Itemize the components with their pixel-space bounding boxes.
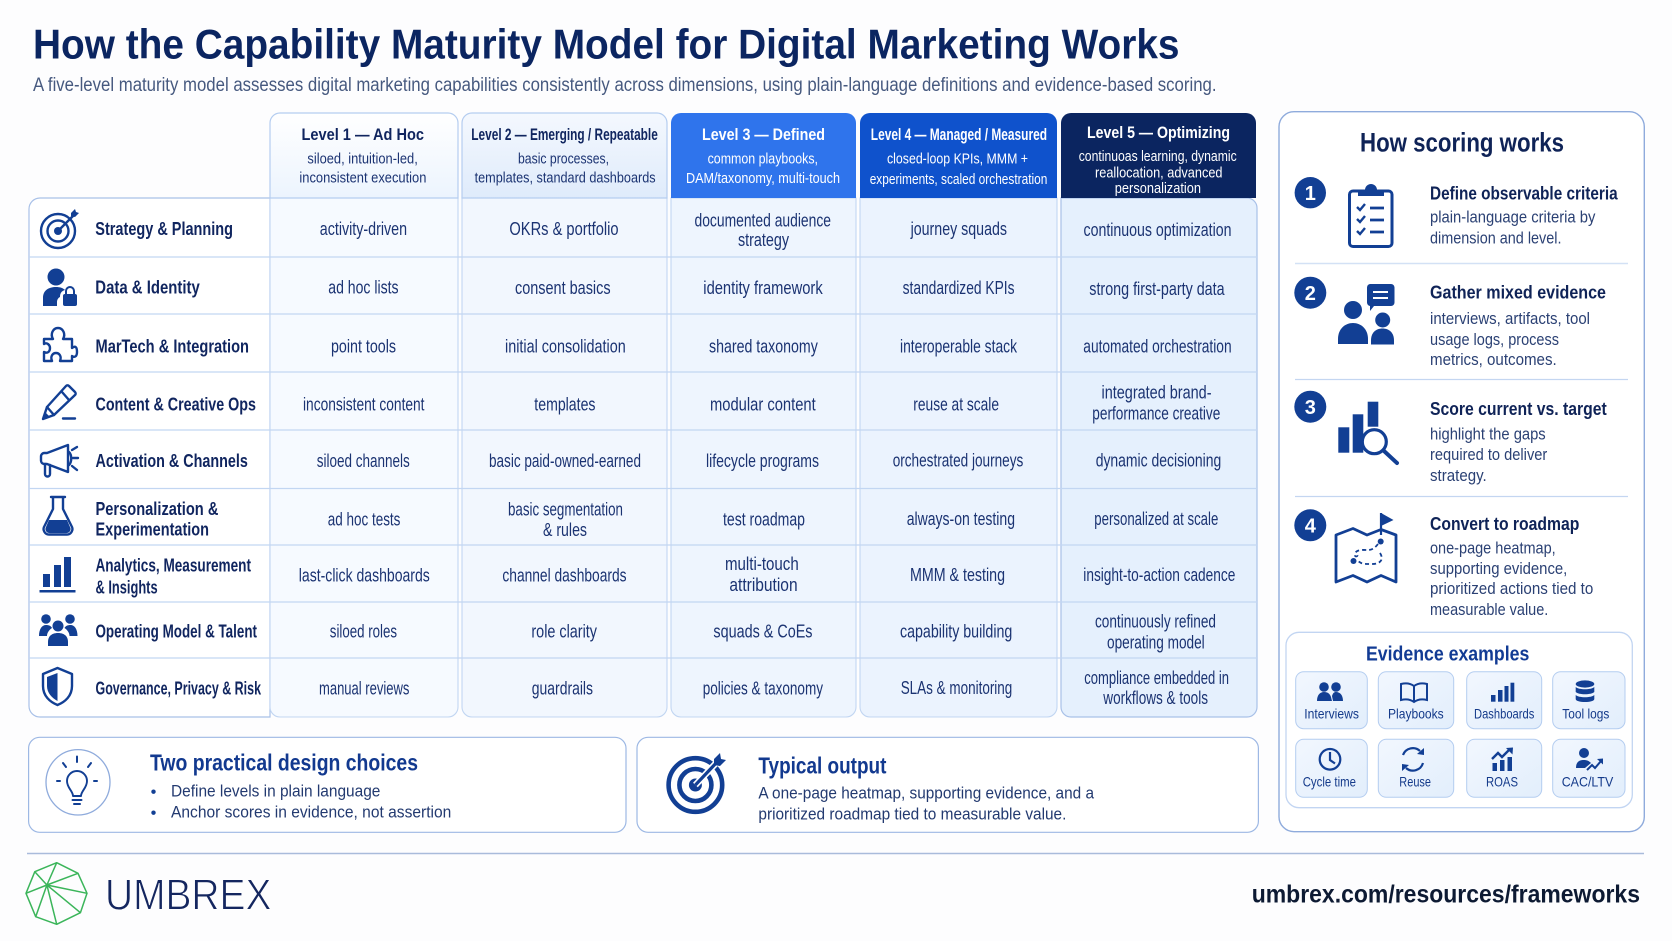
step description: interviews, artifacts, tool (1430, 310, 1590, 328)
heading: Evidence examples (1366, 644, 1529, 666)
cell: & rules (543, 520, 587, 540)
tile: reuse (1378, 739, 1454, 797)
row: personalization and experimentation (44, 497, 1218, 540)
text block: A one-page heatmap, supporting evidence, and a (758, 783, 1094, 802)
label (96, 499, 218, 540)
step description: strategy. (1430, 467, 1487, 485)
cell: identity framework (703, 278, 824, 298)
cell: activity-driven (320, 219, 407, 239)
icon: team (39, 614, 78, 646)
cell: ad hoc tests (328, 509, 400, 529)
cell: capability building (900, 622, 1012, 642)
header: level 5 (1061, 113, 1256, 198)
icon: green polygon mark (26, 863, 87, 924)
tile: interviews: Interviews (1304, 706, 1359, 722)
cell: strategy (738, 230, 789, 250)
icon: people with chat bubble (1338, 284, 1394, 344)
cell: SLAs & monitoring (901, 678, 1012, 698)
tile: roas (1467, 739, 1542, 797)
row: activation and channels (41, 445, 1221, 476)
step description: prioritized actions tied to (1430, 580, 1593, 598)
subtitle: A five-level maturity model assesses digital marketing capabilities consistently across dimensions, using plain-language definitions and evidence-based scoring. (33, 75, 1216, 96)
step description: highlight the gaps (1430, 425, 1546, 443)
number badge (1294, 391, 1326, 423)
tile: tool logs: Tool logs (1562, 706, 1609, 722)
cell: performance creative (1092, 403, 1220, 423)
icon: target (41, 209, 79, 248)
label: Operating Model & Talent (96, 622, 257, 642)
row: strategy and planning (41, 209, 1232, 250)
cell: integrated brand- (1102, 382, 1212, 402)
tile: reuse: Reuse (1399, 774, 1431, 790)
cell (1095, 611, 1216, 652)
cell: siloed roles (330, 622, 397, 642)
tile: cycle time (1296, 739, 1367, 797)
header: level 4: experiments, scaled orchestration (870, 171, 1047, 188)
cell: standardized KPIs (903, 278, 1014, 298)
step description (1430, 425, 1548, 485)
step 1 (1295, 177, 1619, 247)
tile: cac/ltv: CAC/LTV (1562, 774, 1614, 790)
label: Data & Identity (95, 277, 200, 297)
label: Experimentation (96, 520, 209, 540)
cell: policies & taxonomy (703, 679, 823, 699)
panel: maturity matrix (29, 113, 1257, 717)
row: content and creative ops (42, 382, 1220, 423)
icon: megaphone (41, 445, 78, 476)
label: Personalization & (96, 499, 218, 519)
tile: dashboards: Dashboards (1474, 706, 1534, 722)
cell (1092, 382, 1220, 423)
icon: puzzle piece (44, 328, 77, 361)
row: analytics, measurement and insights (40, 554, 1235, 597)
cell: continuous optimization (1084, 220, 1232, 240)
cell: last-click dashboards (299, 566, 430, 586)
cell: test roadmap (723, 509, 805, 529)
icon: bars with magnifier (1338, 402, 1397, 463)
heading: Typical output (758, 752, 887, 778)
cell: basic paid-owned-earned (489, 451, 641, 471)
url: umbrex.com/resources/frameworks (1252, 881, 1640, 909)
header: level 5: personalization (1115, 180, 1201, 197)
cell: lifecycle programs (706, 451, 819, 471)
cell: guardrails (532, 679, 593, 699)
cell: multi-touch (725, 554, 799, 574)
tile: cac/ltv (1553, 739, 1625, 797)
panel: two practical design choices (29, 737, 626, 832)
step description (1430, 209, 1596, 247)
heading: Two practical design choices (150, 750, 418, 776)
cell: journey squads (910, 219, 1007, 239)
label: Strategy & Planning (95, 219, 233, 239)
cell (1084, 668, 1229, 708)
cell: reuse at scale (913, 395, 999, 415)
label (96, 556, 251, 597)
header: level 5: reallocation, advanced (1095, 164, 1222, 181)
label: Activation & Channels (96, 451, 248, 471)
label: MarTech & Integration (96, 337, 249, 357)
icon: bar chart (40, 557, 76, 592)
number badge: 4 (1305, 516, 1317, 538)
tile: playbooks: Playbooks (1388, 706, 1444, 722)
tile: interviews (1296, 672, 1367, 729)
panel: typical output (637, 737, 1258, 832)
icon: flask (44, 497, 72, 535)
cell: strong first-party data (1089, 279, 1225, 299)
step description: measurable value. (1430, 601, 1548, 619)
panel: level 2 column (462, 198, 667, 717)
cell: inconsistent content (303, 395, 424, 415)
panel: level 3 column (671, 198, 856, 717)
panel: evidence examples (1286, 632, 1632, 808)
step description (1430, 539, 1593, 619)
number badge (1294, 277, 1326, 309)
header: level 4 (860, 113, 1057, 198)
label: Content & Creative Ops (96, 395, 256, 415)
header: level 5: Level 5 — Optimizing (1087, 123, 1230, 142)
step description: one-page heatmap, (1430, 539, 1556, 557)
bullet list (151, 782, 451, 822)
cell: MMM & testing (910, 565, 1005, 585)
cell: initial consolidation (505, 337, 626, 357)
cell: operating model (1107, 632, 1205, 652)
cell: interoperable stack (900, 337, 1018, 357)
row: governance, privacy and risk (43, 668, 1229, 708)
cell (508, 500, 623, 540)
cell: continuously refined (1095, 611, 1216, 631)
tile: playbooks (1378, 672, 1454, 729)
cell: dynamic decisioning (1096, 451, 1221, 471)
header: level 1: inconsistent execution (299, 169, 426, 186)
cell: always-on testing (907, 509, 1015, 529)
label: Governance, Privacy & Risk (96, 679, 262, 699)
text block: prioritized roadmap tied to measurable value. (758, 804, 1066, 823)
icon: clipboard checklist (1350, 184, 1392, 246)
panel: level 5 column (1061, 198, 1257, 717)
cell: shared taxonomy (709, 337, 818, 357)
step description (1430, 310, 1590, 369)
header: level 1: siloed, intuition-led, (307, 150, 418, 167)
header: level 3 (671, 113, 856, 198)
cell: point tools (331, 337, 396, 357)
panel: level 1 column (270, 198, 458, 717)
header: level 4: Level 4 — Managed / Measured (871, 125, 1047, 144)
cell: channel dashboards (502, 566, 626, 586)
cell: documented audience (694, 211, 831, 231)
panel: level 4 column (860, 198, 1057, 717)
cell: basic segmentation (508, 500, 623, 520)
header: level 1: Level 1 — Ad Hoc (302, 125, 424, 144)
cell: manual reviews (319, 679, 409, 699)
icon: roadmap with flag (1336, 513, 1396, 582)
step 2 (1294, 277, 1606, 369)
heading: How scoring works (1360, 128, 1564, 158)
row: martech and integration (44, 328, 1232, 361)
number badge (1295, 177, 1326, 208)
header: level 4: closed-loop KPIs, MMM + (887, 150, 1028, 168)
panel: dimension column background (29, 198, 270, 717)
row: operating model and talent (39, 611, 1216, 652)
step description: dimension and level. (1430, 229, 1562, 247)
tile: tool logs (1553, 672, 1625, 729)
label: & Insights (96, 577, 158, 597)
logo: umbrex (26, 863, 271, 924)
cell: role clarity (531, 622, 597, 642)
label: Analytics, Measurement (96, 556, 251, 576)
number badge (1294, 509, 1326, 541)
header: level 2 (462, 113, 667, 198)
step 4 (1294, 509, 1593, 619)
row: data and identity (43, 268, 1225, 306)
number badge: 3 (1305, 397, 1316, 419)
step description: metrics, outcomes. (1430, 351, 1557, 369)
bullet list: Define levels in plain language (171, 782, 380, 801)
header: level 3: Level 3 — Defined (702, 125, 825, 144)
cell: orchestrated journeys (893, 451, 1023, 471)
header: level 2: Level 2 — Emerging / Repeatable (471, 125, 658, 144)
title: How the Capability Maturity Model for Digital Marketing Works (33, 20, 1180, 68)
header: level 5: continuoas learning, dynamic (1079, 148, 1237, 165)
step title: Define observable criteria (1430, 183, 1619, 203)
step description: usage logs, process (1430, 331, 1559, 349)
text block (758, 783, 1094, 823)
wordmark: UMBREX (105, 870, 271, 919)
icon: pencil (42, 385, 76, 420)
cell: consent basics (515, 278, 611, 298)
number badge: 1 (1305, 183, 1316, 205)
cell (725, 554, 799, 595)
cell: squads & CoEs (713, 622, 812, 642)
cell: attribution (729, 575, 798, 595)
cell: modular content (710, 395, 816, 415)
cell: templates (534, 395, 596, 415)
header: level 2: templates, standard dashboards (475, 169, 656, 186)
icon: bullseye with arrow (669, 753, 726, 812)
cell: automated orchestration (1083, 337, 1232, 357)
step title: Convert to roadmap (1430, 514, 1579, 534)
step description: plain-language criteria by (1430, 209, 1596, 227)
step description: required to deliver (1430, 446, 1548, 464)
step title: Score current vs. target (1430, 399, 1607, 419)
cell: ad hoc lists (328, 277, 398, 297)
tile: cycle time: Cycle time (1303, 774, 1356, 790)
header: level 1 (270, 113, 458, 198)
icon: person with lock (43, 268, 77, 306)
icon: lightbulb (46, 750, 110, 815)
header: level 3: common playbooks, (708, 150, 818, 167)
cell (694, 211, 831, 250)
cell: insight-to-action cadence (1083, 565, 1235, 585)
tile: dashboards (1467, 672, 1542, 729)
panel: how scoring works (1279, 112, 1644, 832)
bullet list: Anchor scores in evidence, not assertion (171, 803, 451, 822)
cell: workflows & tools (1103, 688, 1208, 708)
header: level 2: basic processes, (518, 150, 609, 167)
header: level 3: DAM/taxonomy, multi-touch (686, 170, 840, 187)
cell: compliance embedded in (1084, 668, 1229, 688)
number badge: 2 (1305, 283, 1316, 305)
icon: shield (43, 668, 72, 705)
step 3 (1294, 391, 1607, 485)
cell: OKRs & portfolio (509, 219, 619, 239)
step description: supporting evidence, (1430, 560, 1567, 578)
cell: personalized at scale (1094, 509, 1218, 529)
cell: siloed channels (317, 451, 410, 471)
step title: Gather mixed evidence (1430, 282, 1606, 302)
tile: roas: ROAS (1486, 774, 1518, 790)
